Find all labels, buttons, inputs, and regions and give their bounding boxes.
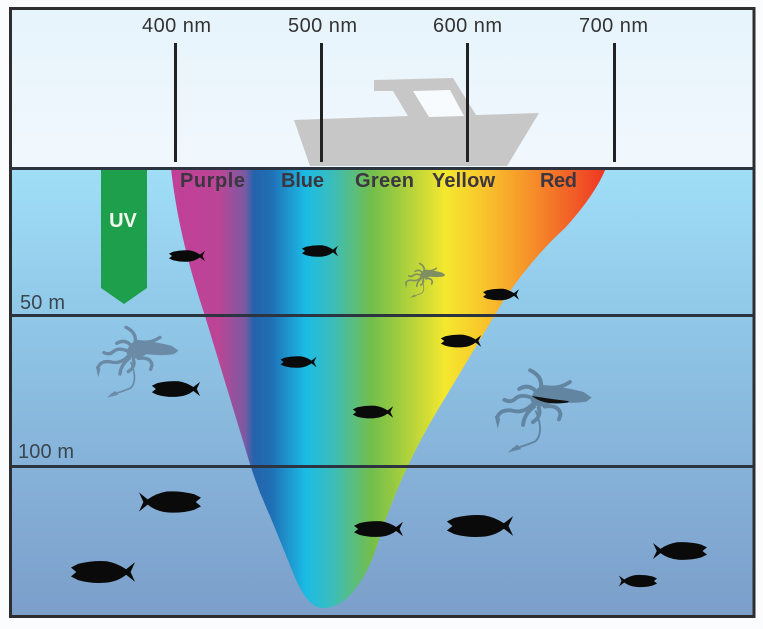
UV arrow: UV: [109, 210, 138, 232]
colour labels: Blue: [281, 170, 324, 192]
colour labels: Purple: [180, 170, 245, 192]
wavelength tick: 500 nm: 500 nm: [288, 15, 357, 37]
UV arrow: [101, 168, 147, 304]
light spectrum wedge: [171, 168, 606, 608]
wavelength tick: 700 nm: [579, 15, 648, 162]
depth lines: [11, 167, 754, 468]
wavelength tick: 700 nm: 700 nm: [579, 15, 648, 37]
squid: small on spectrum: [405, 263, 445, 298]
colour labels: Red: [540, 170, 577, 192]
boat: [294, 78, 539, 166]
wavelength tick: 400 nm: [142, 15, 211, 162]
wavelength tick: 600 nm: [433, 15, 502, 162]
colour labels: Yellow: [432, 170, 495, 192]
wavelength tick: 400 nm: 400 nm: [142, 15, 211, 37]
water panel: [11, 168, 754, 616]
colour labels: Green: [355, 170, 414, 192]
squid: left: [96, 327, 178, 397]
wavelength tick: 600 nm: 600 nm: [433, 15, 502, 37]
depth label: 50 m: 50 m: [20, 292, 65, 314]
squid: right with dark patch: [495, 370, 591, 452]
fish school: [71, 245, 707, 587]
sky panel: [11, 9, 754, 168]
colour labels: [180, 170, 577, 192]
wavelength tick: 500 nm: [288, 15, 357, 162]
depth label: 100 m: 100 m: [18, 441, 74, 463]
